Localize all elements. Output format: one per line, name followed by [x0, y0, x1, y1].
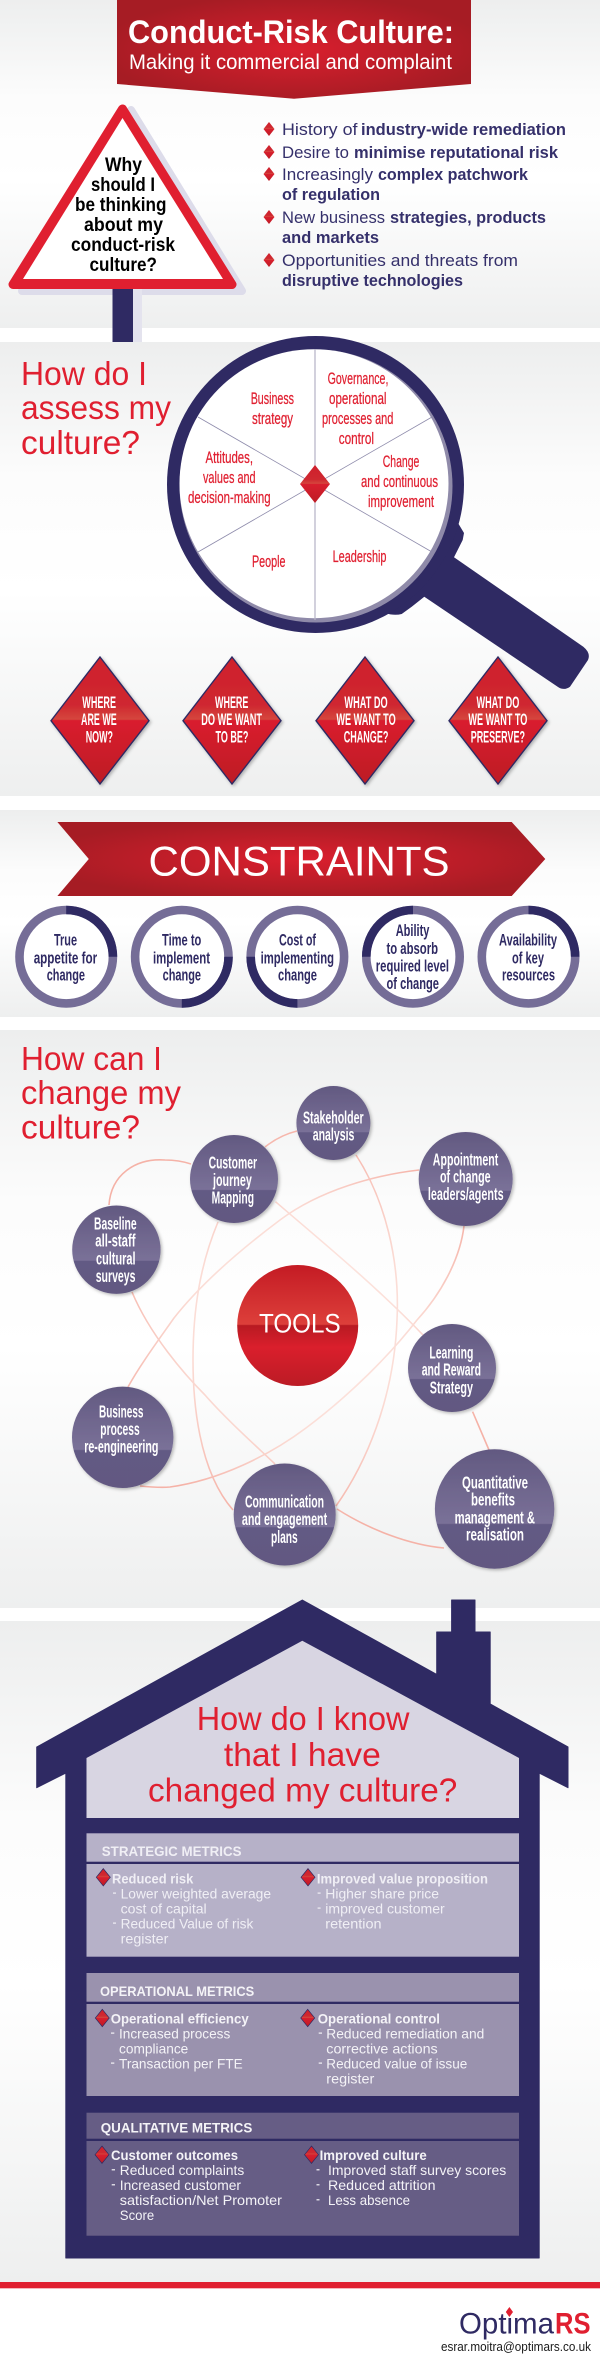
metric: operational control: Reduced remediation and: [326, 2025, 484, 2041]
node: appointment of leaders: Appointment: [433, 1149, 498, 1169]
bullet list of reasons: disruptive technologies: [282, 271, 463, 290]
metric: reduced risk: Reduced Value of risk: [121, 1915, 254, 1931]
metric: reduced risk: cost of capital: [121, 1900, 207, 1916]
metric: operational control: register: [326, 2070, 375, 2086]
metric: reduced risk: register: [121, 1930, 169, 1946]
logo: OptimaRS: Optima: [459, 2307, 554, 2340]
ring: cost of implementing: implementing: [261, 948, 334, 967]
metric: improved culture: [304, 2146, 506, 2208]
attic with heading: changed my culture?: [148, 1772, 457, 1809]
road sign with question: be thinking: [75, 194, 166, 216]
metric: improved culture: Improved culture: [320, 2147, 427, 2163]
bullet list of reasons: complex patchwork: [378, 165, 529, 184]
central sphere: tools: [237, 1265, 358, 1386]
ring: true appetite: appetite for: [34, 948, 97, 967]
ring: ability to absorb: of change: [386, 974, 439, 993]
bullet list of reasons: Desire to: [282, 143, 349, 162]
node: stakeholder analysis: [296, 1086, 370, 1160]
bullet list of reasons: and markets: [282, 228, 379, 247]
node: learning and reward: and Reward: [422, 1360, 481, 1380]
road sign with question: should I: [91, 174, 155, 196]
title banner: Conduct-Risk Culture:: [128, 14, 454, 50]
node: appointment of leaders: leaders/agents: [428, 1184, 504, 1204]
metric: operational efficiency: [95, 2009, 249, 2071]
node: quantitative benefits: management &: [455, 1507, 535, 1527]
node: baseline surveys: surveys: [96, 1266, 136, 1286]
ring: availability of resources: Availability: [499, 931, 557, 950]
label: governance: control: [339, 429, 374, 448]
diamond: what do we want to change: WHAT DO: [344, 693, 388, 712]
ring: time to implement: change: [163, 966, 201, 984]
panel: why think about culture: [0, 0, 600, 348]
road sign with question: [13, 109, 242, 348]
road sign with question: about my: [84, 214, 163, 236]
node: communication plans: and engagement: [242, 1509, 327, 1529]
label: business strategy: [251, 389, 294, 428]
metric: improved culture: Improved staff survey scores: [328, 2162, 506, 2178]
panel: operational metrics: OPERATIONAL METRICS: [100, 1983, 254, 1999]
road sign with question: culture?: [90, 254, 157, 276]
bullet list of reasons: [264, 120, 566, 290]
metric: operational control: Operational control: [318, 2010, 440, 2026]
node: quantitative benefits: [435, 1449, 554, 1569]
ring: time to implement: [135, 910, 228, 1003]
node: quantitative benefits: Quantitative: [462, 1472, 528, 1492]
heading: how do I assess: culture?: [21, 424, 140, 461]
diamond: where do we want to be: TO BE?: [216, 728, 248, 747]
label: leadership: Leadership: [333, 547, 386, 566]
panel: qualitative metrics: [86, 2113, 519, 2236]
panel: strategic metrics: [86, 1833, 519, 1957]
label: business strategy: Business: [251, 389, 294, 408]
node: baseline surveys: [72, 1206, 161, 1294]
bullet list of reasons: History of: [282, 120, 358, 139]
ring: ability to absorb: required level: [376, 957, 449, 976]
constraints arrow banner: CONSTRAINTS: [148, 837, 450, 884]
attic with heading: [86, 1641, 519, 1818]
contact email: esrar.moitra@optimars.co.uk: [441, 2340, 592, 2354]
node: business process: [72, 1387, 173, 1488]
panel: strategic metrics: STRATEGIC METRICS: [102, 1843, 242, 1859]
ring: time to implement: implement: [153, 948, 210, 967]
label: governance: [322, 369, 393, 448]
diamond: what do we want to preserve: WHAT DO: [476, 693, 519, 712]
heading: how can I change: change my: [21, 1074, 181, 1111]
diamond: where are we now: NOW?: [86, 728, 113, 747]
metric: customer outcomes: [95, 2146, 282, 2223]
node: baseline surveys: all-staff: [95, 1231, 136, 1251]
node: business process: process: [100, 1419, 140, 1439]
bullet list of reasons: of regulation: [282, 185, 380, 204]
node: baseline surveys: cultural: [96, 1248, 136, 1268]
metric: customer outcomes: Score: [120, 2207, 154, 2223]
metric: improved value proposition: Improved value proposition: [317, 1870, 488, 1886]
diamond: what do we want to change: CHANGE?: [344, 728, 388, 747]
label: attitudes: Attitudes,: [206, 448, 253, 467]
metric: reduced risk: [96, 1869, 271, 1946]
title banner: Making it commercial and complaint: [129, 51, 452, 74]
heading: how can I change: [21, 1040, 181, 1146]
panel: operational metrics: [86, 1973, 519, 2096]
bullet list of reasons: industry-wide remediation: [361, 120, 566, 139]
ring: ability to absorb: [366, 910, 460, 1003]
bullet list of reasons: Opportunities and threats from: [282, 251, 518, 270]
heading: how can I change: How can I: [21, 1040, 162, 1077]
metric: operational efficiency: Transaction per FTE: [119, 2055, 243, 2071]
diamond: where do we want to be: WHERE: [215, 693, 248, 712]
footer: [0, 2282, 600, 2354]
metric: reduced risk: Reduced risk: [112, 1870, 193, 1886]
node: business process: re-engineering: [84, 1437, 158, 1457]
bullet list of reasons: strategies, products: [390, 208, 546, 227]
diamond: what do we want to preserve: WE WANT TO: [468, 710, 527, 729]
ring: cost of implementing: change: [278, 966, 317, 984]
ring: true appetite: [19, 910, 113, 1003]
label: change: and continuous: [361, 472, 438, 491]
diamond: where are we now: ARE WE: [81, 710, 117, 729]
diamond: where do we want to be: DO WE WANT: [201, 710, 262, 729]
ring: true appetite: True: [54, 931, 77, 950]
node: stakeholder analysis: Stakeholder: [303, 1107, 364, 1127]
metric: improved value proposition: retention: [325, 1915, 382, 1931]
magnifying glass wheel: [167, 336, 589, 689]
node: customer journey mapping: Mapping: [212, 1187, 254, 1207]
label: attitudes: decision-making: [188, 488, 271, 507]
node: learning and reward: Learning: [429, 1342, 473, 1362]
metric: improved value proposition: improved customer: [325, 1900, 445, 1916]
label: change: improvement: [368, 492, 434, 511]
node: communication plans: Communication: [245, 1492, 324, 1512]
panel: constraints: [0, 810, 600, 1017]
node: appointment of leaders: of change: [440, 1167, 491, 1187]
panel: metrics house: [0, 1600, 600, 2282]
diamond: what do we want to preserve: PRESERVE?: [471, 728, 525, 747]
node: stakeholder analysis: analysis: [313, 1125, 355, 1145]
constraints arrow banner: [57, 822, 545, 896]
bullet list of reasons: New business: [282, 208, 385, 227]
diamond: what do we want to change: [316, 657, 414, 784]
label: attitudes: values and: [203, 468, 256, 487]
node: learning and reward: [408, 1324, 496, 1412]
label: business strategy: strategy: [252, 409, 293, 428]
ring: true appetite: change: [47, 966, 85, 984]
bullet list of reasons: Increasingly: [282, 165, 373, 184]
node: communication plans: plans: [271, 1527, 298, 1547]
label: governance: Governance,: [328, 369, 388, 388]
panel: change tools: [0, 1030, 600, 1608]
question diamonds: [51, 657, 547, 784]
ring: time to implement: Time to: [162, 931, 201, 950]
metric: reduced risk: Lower weighted average: [121, 1885, 271, 1901]
metric: improved value proposition: [301, 1869, 488, 1931]
ring: cost of implementing: [251, 910, 344, 1003]
ring: ability to absorb: to absorb: [386, 939, 438, 958]
node: appointment of leaders: [419, 1132, 513, 1226]
attic with heading: that I have: [224, 1736, 381, 1773]
house outline: [37, 1600, 568, 2258]
ring: cost of implementing: Cost of: [279, 931, 316, 950]
diamond: where are we now: [51, 657, 149, 784]
metric: customer outcomes: satisfaction/Net Promoter: [120, 2192, 282, 2208]
orbit connector lines: [109, 1131, 489, 1548]
ring: ability to absorb: Ability: [396, 921, 430, 940]
metric: customer outcomes: Increased customer: [120, 2177, 241, 2193]
metric: customer outcomes: Reduced complaints: [120, 2162, 244, 2178]
attic with heading: How do I know: [197, 1700, 410, 1737]
metric: customer outcomes: Customer outcomes: [111, 2147, 238, 2163]
metric: improved value proposition: Higher share price: [325, 1885, 439, 1901]
bullet list of reasons: minimise reputational risk: [354, 143, 559, 162]
diamond: where do we want to be: [183, 657, 281, 784]
road sign with question: Why: [105, 154, 142, 176]
label: change: [361, 452, 438, 511]
ring: availability of resources: of key: [512, 948, 544, 967]
heading: how do I assess: How do I: [21, 355, 147, 392]
diamond: where are we now: WHERE: [82, 693, 116, 712]
label: governance: operational: [329, 389, 386, 408]
node: customer journey mapping: journey: [212, 1170, 252, 1190]
title banner: [117, 0, 471, 99]
heading: how do I assess: assess my: [21, 389, 171, 426]
label: people: People: [252, 552, 286, 571]
ring: availability of resources: [482, 910, 575, 1003]
label: governance: processes and: [322, 409, 393, 428]
node: quantitative benefits: benefits: [471, 1490, 515, 1510]
metric: operational efficiency: Increased process: [119, 2025, 230, 2041]
node: customer journey mapping: [190, 1135, 278, 1223]
node: baseline surveys: Baseline: [94, 1213, 137, 1233]
metric: operational control: Reduced value of issue: [326, 2055, 467, 2071]
ring: availability of resources: resources: [502, 966, 555, 984]
central sphere: tools: TOOLS: [259, 1309, 341, 1339]
node: quantitative benefits: realisation: [466, 1525, 524, 1545]
metric: operational control: corrective actions: [326, 2040, 438, 2056]
panel: qualitative metrics: QUALITATIVE METRICS: [101, 2119, 252, 2135]
label: change: Change: [383, 452, 419, 471]
node: business process: Business: [99, 1402, 144, 1422]
diamond: what do we want to change: WE WANT TO: [336, 710, 396, 729]
metric: operational control: [301, 2009, 484, 2086]
metric: operational efficiency: compliance: [119, 2040, 188, 2056]
metric: improved culture: Reduced attrition: [328, 2177, 436, 2193]
label: attitudes: [188, 448, 271, 507]
metric: operational efficiency: Operational efficiency: [111, 2010, 249, 2026]
road sign with question: conduct-risk: [71, 234, 175, 256]
heading: how do I assess: [21, 355, 171, 461]
panel: assess culture: [0, 336, 600, 796]
metric: improved culture: Less absence: [328, 2192, 410, 2208]
node: customer journey mapping: Customer: [209, 1152, 257, 1172]
diamond: what do we want to preserve: [449, 657, 547, 784]
logo: OptimaRS: RS: [555, 2307, 590, 2340]
node: learning and reward: Strategy: [430, 1377, 473, 1397]
node: communication plans: [234, 1464, 336, 1566]
heading: how can I change: culture?: [21, 1109, 140, 1146]
